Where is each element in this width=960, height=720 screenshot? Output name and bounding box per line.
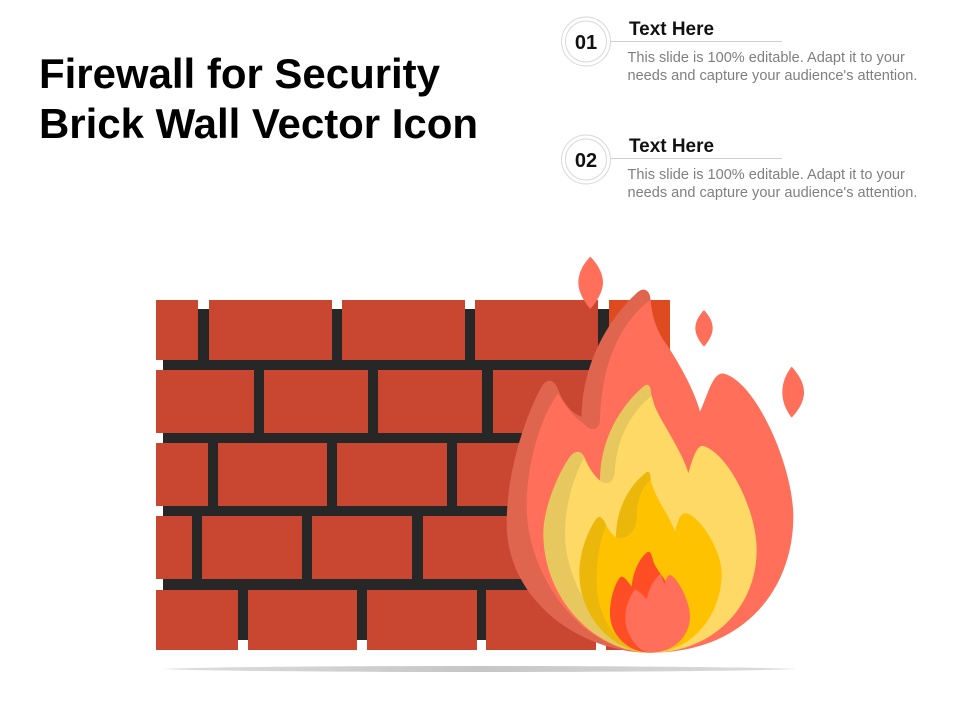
- middle flame: [565, 395, 757, 653]
- core flame front: [625, 573, 690, 653]
- title: Firewall for Security: [39, 50, 441, 97]
- badge 01: 01: [575, 32, 597, 54]
- heading 01: Text Here: [629, 19, 714, 40]
- outer flame shade: [507, 290, 667, 653]
- badge 02: [562, 135, 610, 184]
- badge 01: [562, 17, 610, 66]
- title: Brick Wall Vector Icon: [39, 100, 478, 147]
- description 01: This slide is 100% editable. Adapt it to your: [628, 50, 905, 66]
- inner flame shade: [579, 472, 657, 653]
- core flame back: [610, 552, 677, 653]
- heading 02: Text Here: [629, 136, 714, 157]
- flame: [507, 257, 804, 653]
- sparks: [578, 257, 804, 418]
- middle flame shade: [543, 385, 653, 653]
- title: [39, 50, 478, 147]
- description 02: needs and capture your audience's attention.: [628, 185, 917, 201]
- outer flame: [527, 300, 793, 653]
- item 01: [562, 17, 917, 84]
- ground shadow: [163, 666, 797, 672]
- brick wall: [156, 300, 670, 650]
- description 01: needs and capture your audience's attention.: [628, 68, 917, 84]
- description 02: This slide is 100% editable. Adapt it to your: [628, 167, 905, 183]
- badge 02: 02: [575, 150, 597, 172]
- item 02: [562, 135, 917, 201]
- inner flame: [597, 480, 722, 653]
